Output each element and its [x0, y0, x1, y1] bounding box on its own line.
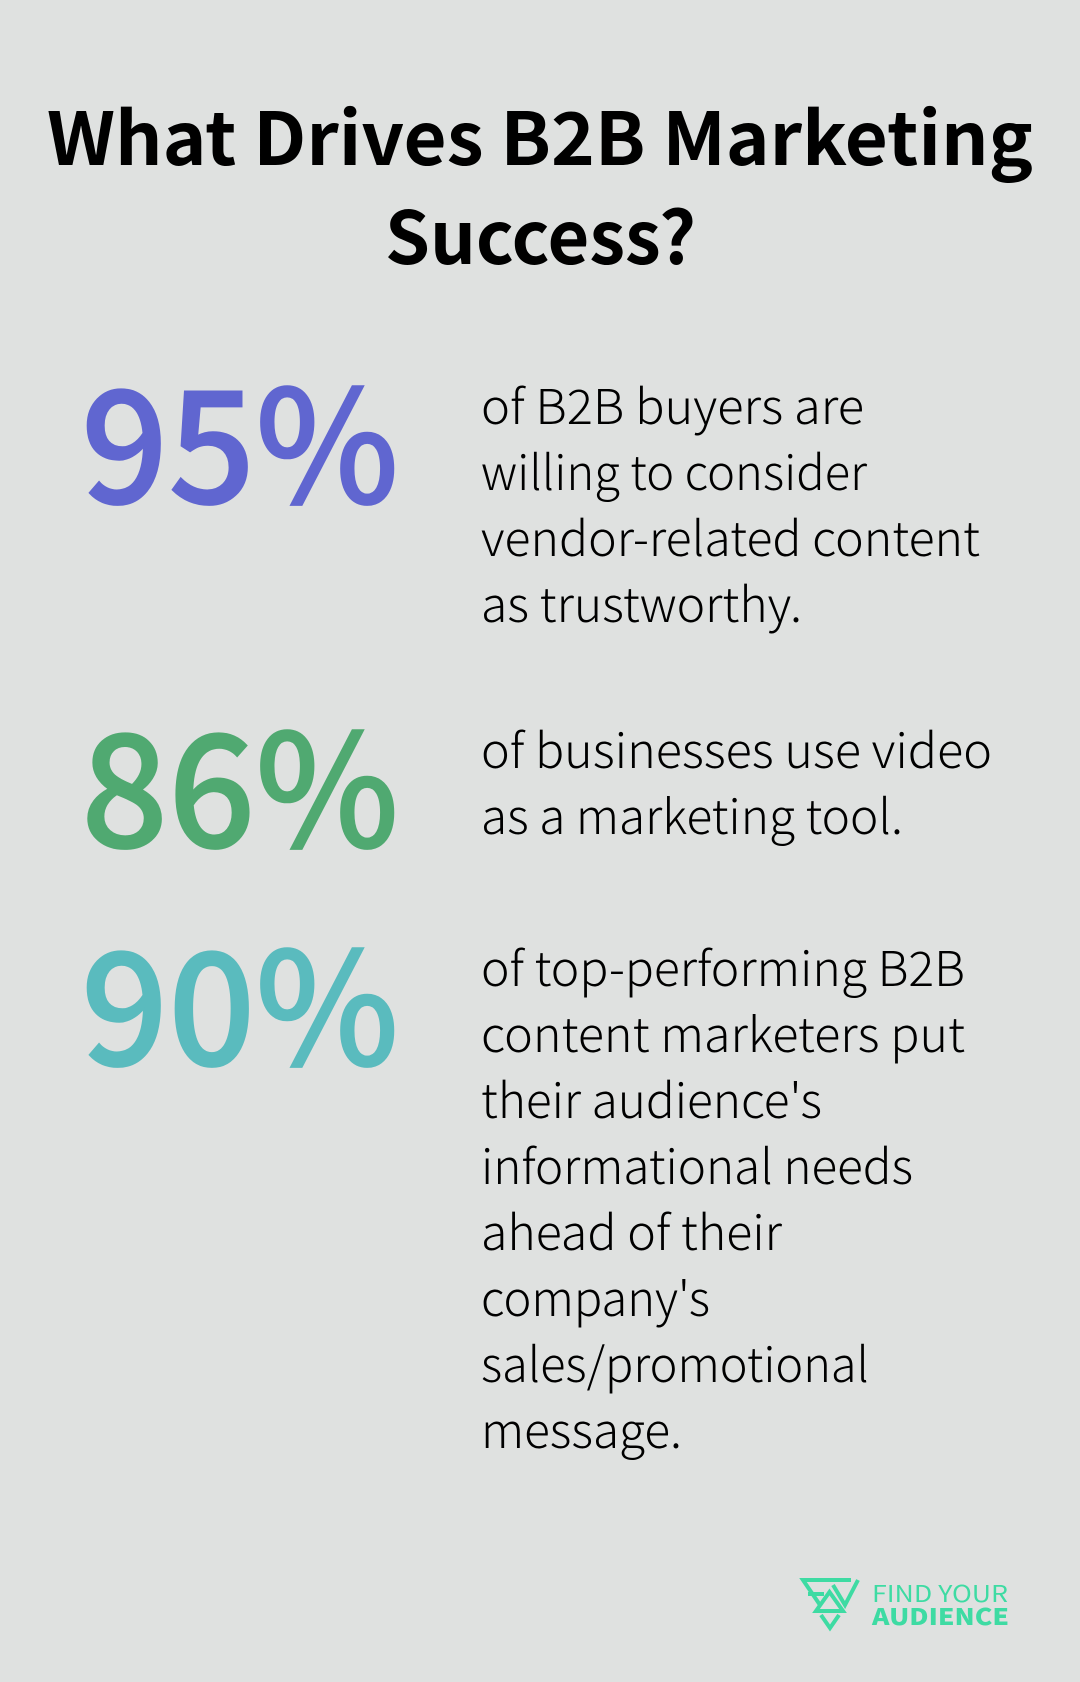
stat: 86%: 86% — [81, 666, 399, 892]
text block: 90% description: of top-performing B2B — [481, 930, 965, 1000]
text block: 95% description: willing to consider — [481, 434, 868, 504]
text block: 90% description: company's — [481, 1260, 710, 1330]
stat: 90%: 90% — [81, 884, 399, 1110]
text block: 86% description — [481, 712, 992, 848]
text block: 90% description: sales/promotional — [481, 1326, 869, 1396]
title: What Drives B2B Marketing — [47, 81, 1033, 187]
text block: 95% description: vendor-related content — [481, 500, 980, 570]
logo wordmark: FIND YOUR — [872, 1575, 1008, 1609]
logo: Find Your Audience — [803, 1575, 1009, 1632]
text block: 90% description: informational needs — [481, 1128, 913, 1198]
logo wordmark: AUDIENCE — [871, 1598, 1009, 1632]
text block: 95% description — [481, 368, 980, 636]
logo wordmark — [871, 1575, 1009, 1632]
text block: 90% description: ahead of their — [481, 1194, 783, 1264]
text block: 90% description — [481, 930, 965, 1462]
title: Success? — [385, 180, 696, 286]
text block: 86% description: as a marketing tool. — [481, 778, 903, 848]
title — [47, 81, 1033, 286]
text block: 86% description: of businesses use video — [481, 712, 992, 782]
icon: triangle logo mark — [803, 1580, 858, 1628]
stat: 95%: 95% — [81, 322, 399, 548]
text block: 90% description: message. — [481, 1392, 682, 1462]
text block: 95% description: of B2B buyers are — [481, 368, 864, 438]
text block: 90% description: their audience's — [481, 1062, 822, 1132]
text block: 90% description: content marketers put — [481, 996, 965, 1066]
text block: 95% description: as trustworthy. — [481, 566, 802, 636]
